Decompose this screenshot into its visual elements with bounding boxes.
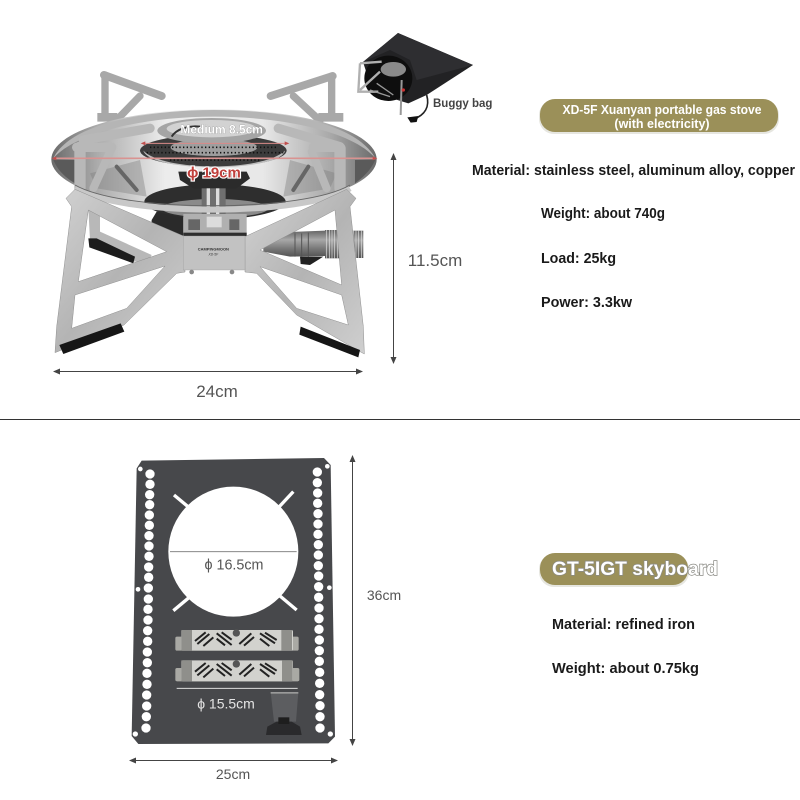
diameter lines <box>52 141 377 160</box>
spec: skyboard material: Material: refined iron <box>552 617 695 633</box>
front rim <box>75 185 350 210</box>
rear legs and feet <box>88 208 323 265</box>
heading pill: stove: XD-5F Xuanyan portable gas stove <box>562 103 762 117</box>
windshield bowl <box>51 109 377 209</box>
brand block: CAMPINGMOON <box>198 247 229 252</box>
front feet <box>59 323 360 357</box>
spec: material: Material: stainless steel, aluminum alloy, copper <box>472 163 795 179</box>
burner base <box>144 172 286 219</box>
dimension: stove height: 11.5cm <box>408 251 462 270</box>
label: opening diameter: ϕ 16.5cm <box>204 557 263 573</box>
label: medium burner diameter: Medium 8.5cm <box>180 122 263 136</box>
gas connector <box>263 230 363 258</box>
inner diameter line <box>170 550 297 553</box>
spec: power: Power: 3.3kw <box>541 295 633 311</box>
spec: skyboard weight: Weight: about 0.75kg <box>552 661 699 677</box>
heading pill: stove <box>539 99 779 134</box>
pot support rear right <box>271 76 343 121</box>
corner screw holes <box>133 464 333 737</box>
heading pill: stove: (with electricity) <box>614 117 710 131</box>
left hole column <box>141 469 155 733</box>
cooking opening <box>168 487 298 617</box>
board plate <box>132 458 335 744</box>
brand block <box>183 236 245 274</box>
panel: skyboard product photo <box>132 458 335 744</box>
dimension: board height: 36cm <box>367 587 401 603</box>
valve assembly <box>183 214 247 236</box>
bracket width line <box>177 687 298 690</box>
arrow: stove height <box>392 154 394 363</box>
icon: carry bag with stove <box>358 33 473 123</box>
label: outer diameter: ϕ 19cm <box>187 164 241 181</box>
stand clip <box>266 692 302 735</box>
label: carry bag: Buggy bag <box>433 98 492 110</box>
spec: load: Load: 25kg <box>541 251 616 267</box>
panel: stove product photo <box>51 75 377 357</box>
arrow: stove width <box>54 370 362 372</box>
dimension: stove width: 24cm <box>196 382 238 401</box>
label: bracket span: ϕ 15.5cm <box>197 696 255 712</box>
arrow: board width <box>130 760 337 762</box>
dimension: board width: 25cm <box>216 766 250 782</box>
right hole column <box>313 467 325 733</box>
stove frame legs <box>55 189 364 354</box>
heading pill: skyboard <box>539 553 718 587</box>
brand block: XD-5F <box>208 253 219 257</box>
section divider <box>0 419 800 420</box>
arrow: board height <box>352 456 354 745</box>
pot supports front <box>77 128 340 190</box>
bracket top <box>175 629 299 651</box>
burner head <box>140 118 287 167</box>
pot support rear left <box>97 75 162 121</box>
heading pill: skyboard: GT-5IGT skyboard <box>552 559 718 580</box>
bracket bottom <box>175 660 299 681</box>
spec: weight: Weight: about 740g <box>541 206 665 222</box>
